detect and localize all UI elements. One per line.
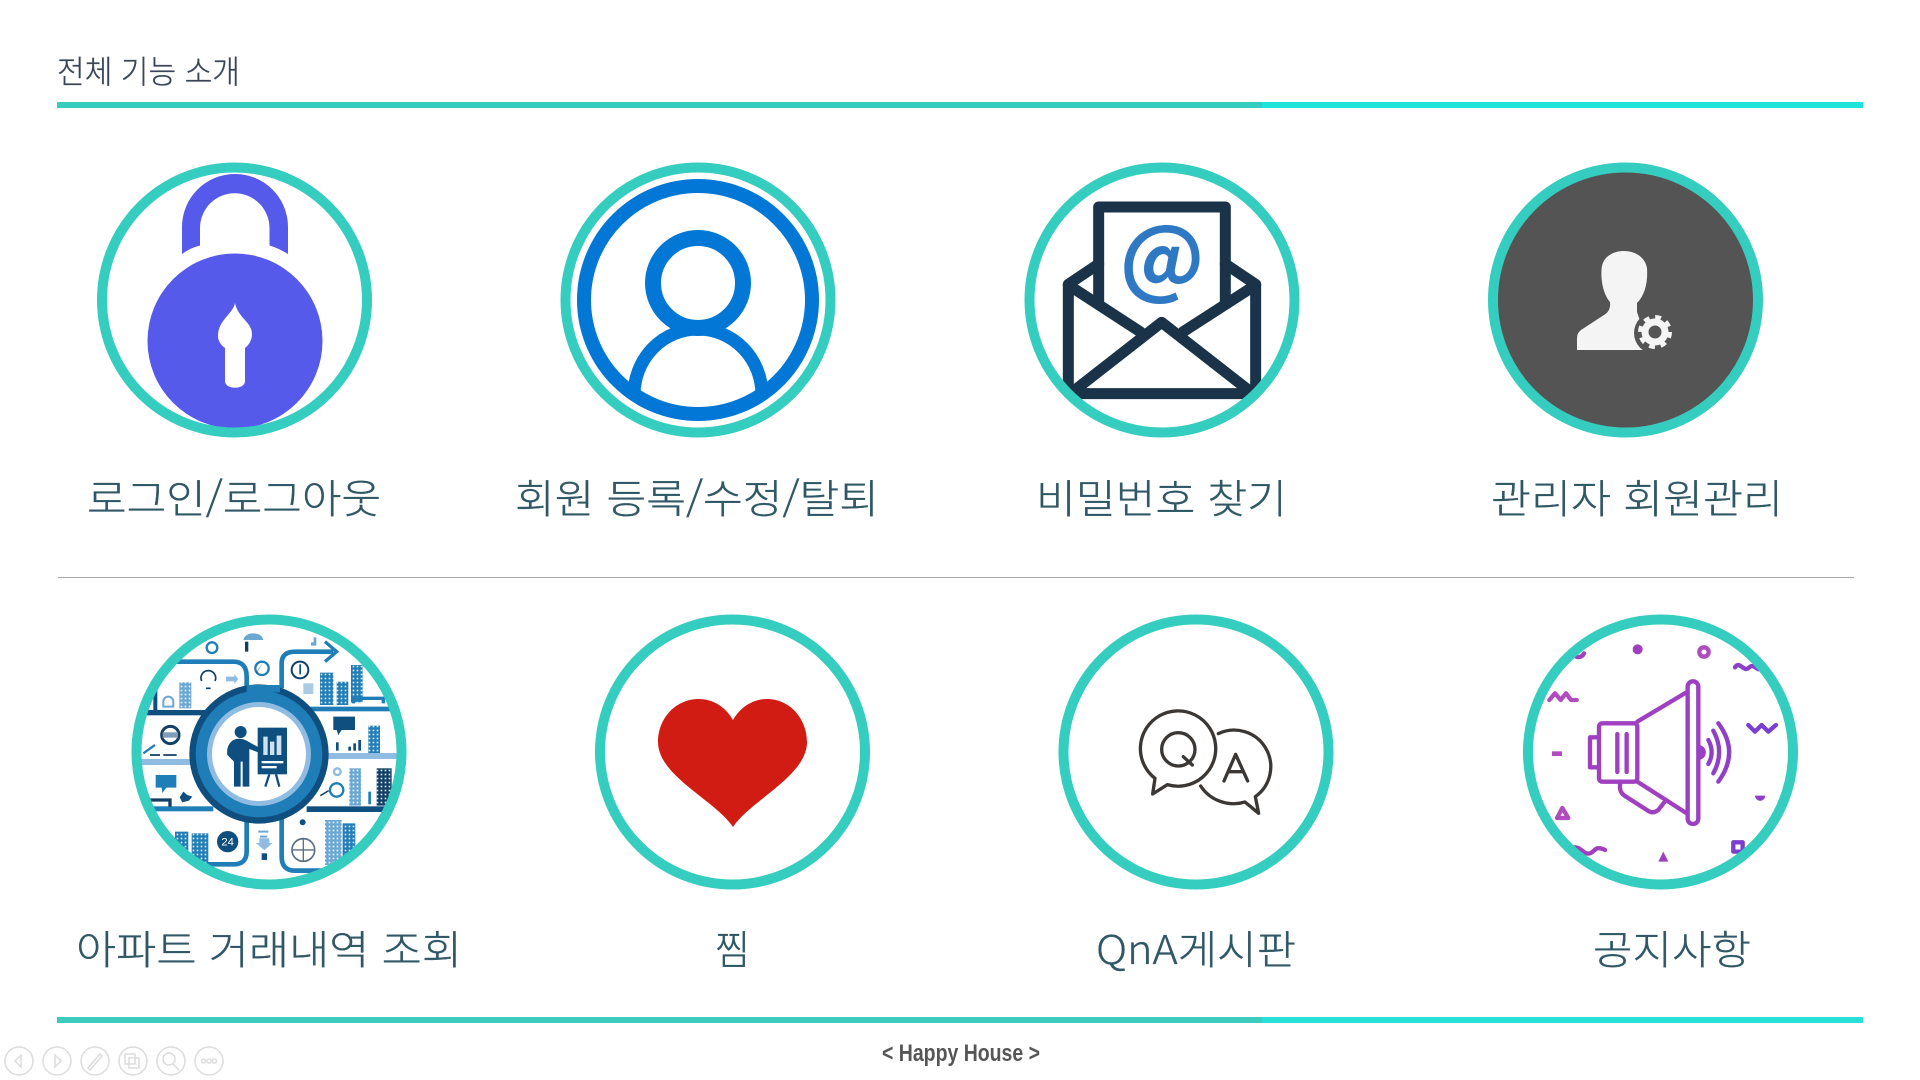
panel: QnA board (1064, 620, 1328, 976)
footer rule (57, 1017, 1863, 1023)
icon: city data illustration: 24 (221, 837, 234, 849)
icon: padlock (102, 168, 367, 432)
panel: favorites (600, 620, 865, 976)
label: admin member management: 관리자 회원관리 (1491, 467, 1783, 525)
icon: envelope with at sign (1030, 168, 1294, 432)
panel: member registration (515, 168, 879, 525)
label: member registration: 회원 등록/수정/탈퇴 (515, 467, 879, 525)
icon: megaphone speaker (1528, 620, 1793, 884)
icon: heart (600, 620, 865, 884)
panel: notices (1528, 620, 1793, 976)
panel: admin member management (1491, 168, 1783, 525)
slideshow navigation icons (5, 1047, 223, 1075)
label: find password: 비밀번호 찾기 (1036, 467, 1287, 525)
header rule (57, 102, 1863, 108)
icon: admin user with gear (1493, 168, 1758, 432)
footer text: < Happy House > (882, 1040, 1040, 1067)
title: 전체 기능 소개 (57, 47, 240, 93)
icon: city data illustration (136, 620, 403, 884)
icon: user profile (566, 168, 830, 432)
label: notices: 공지사항 (1593, 918, 1751, 976)
label: apartment transactions: 아파트 거래내역 조회 (76, 918, 462, 976)
icon: QnA speech bubbles (1064, 620, 1328, 884)
divider (58, 577, 1854, 578)
panel: find password (1030, 168, 1294, 525)
label: favorites: 찜 (715, 918, 750, 976)
label: login: 로그인/로그아웃 (87, 467, 381, 525)
panel: login / logout (87, 168, 381, 525)
icon: envelope with at sign: @ (1120, 192, 1204, 313)
panel: apartment transactions (76, 620, 462, 976)
label: QnA board: QnA게시판 (1096, 918, 1296, 976)
